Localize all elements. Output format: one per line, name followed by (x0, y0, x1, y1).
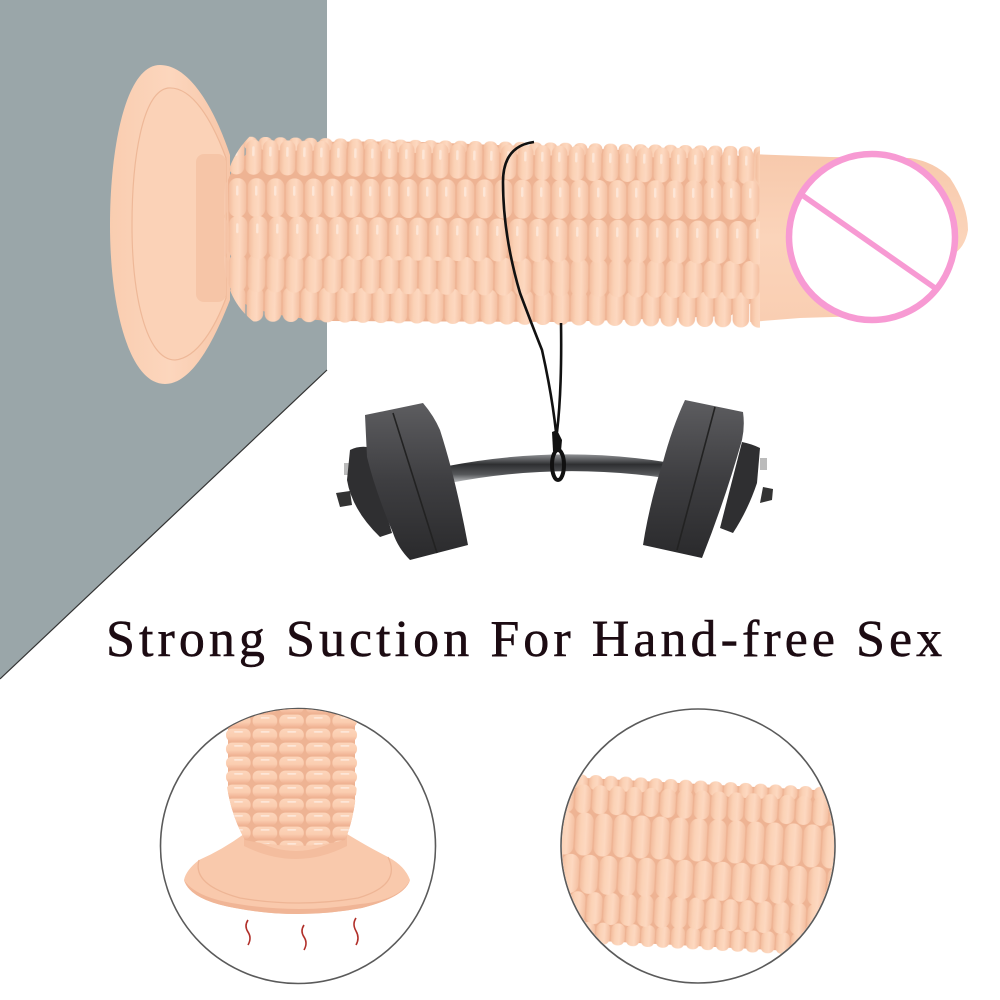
censor mark (789, 154, 955, 320)
bar (448, 454, 665, 483)
suction wave marks (246, 918, 358, 950)
product: suction mounted on wall (110, 65, 968, 384)
detail circle: textured surface (545, 709, 853, 983)
dumbbell (336, 400, 773, 560)
wall panel (0, 0, 327, 679)
cord knot on bar (552, 430, 564, 480)
suction cup (110, 65, 230, 384)
left plates (336, 403, 468, 560)
right plates (643, 400, 773, 558)
textured body (220, 136, 780, 328)
base (184, 825, 410, 914)
tip (750, 154, 968, 322)
detail circle: suction base (160, 696, 436, 984)
cord (503, 142, 561, 432)
heading: Strong Suction For Hand-free Sex (106, 611, 946, 668)
textured column (226, 709, 357, 846)
